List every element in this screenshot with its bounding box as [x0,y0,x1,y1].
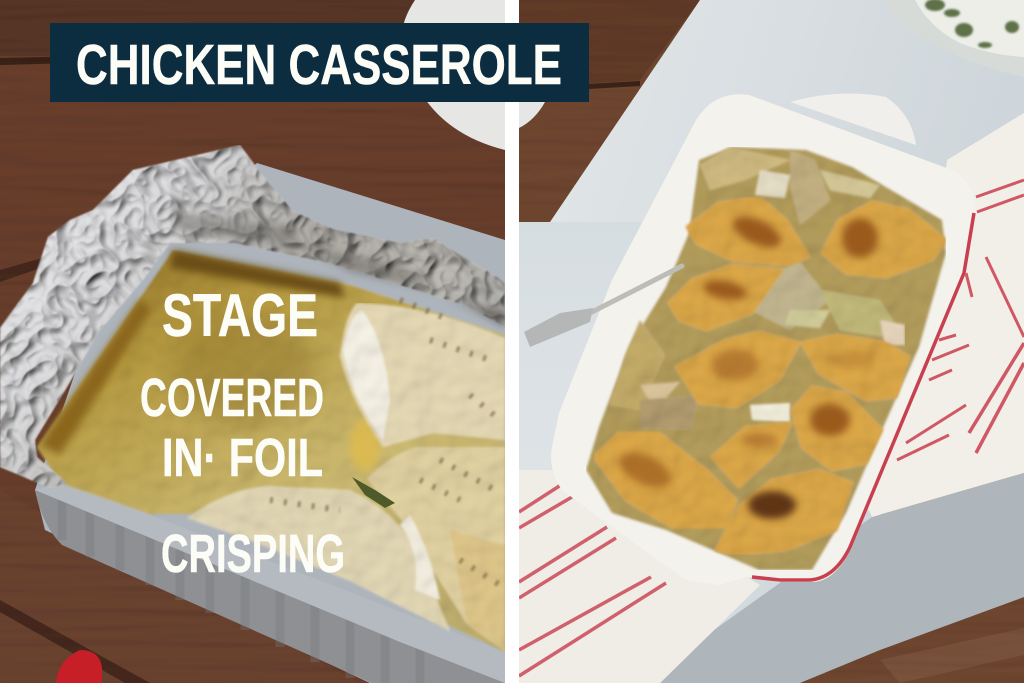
casserole sauce [37,250,505,652]
grey linen cloth top [550,0,1024,630]
herb sprig [352,477,395,508]
chicken pieces [187,303,505,652]
browned chicken spots [614,210,878,519]
chicken seasoning specks [270,300,500,585]
panel: finished casserole photo [519,0,1024,683]
label: covered in foil [140,368,324,488]
label: crisping: CRISPING [161,524,345,584]
sauce shading [40,250,380,471]
serving spoon [524,266,682,347]
wooden table left [0,0,505,683]
roasted chicken pieces [594,197,946,555]
casserole base [586,147,946,570]
label: covered in foil: IN· FOIL [162,428,323,488]
white plate edge under banner [519,102,545,128]
grey cloth lower [640,473,1024,683]
baking dish [35,163,505,683]
baking dish white [551,94,976,585]
title text: CHICKEN CASSEROLE [76,33,562,97]
side plate top right [915,0,1024,76]
tomato [56,650,102,683]
striped towel left [519,222,760,683]
striped towel right [860,113,1024,517]
label: covered in foil: COVERED [140,368,324,428]
aluminium foil [0,145,505,488]
wooden table right [519,0,1024,683]
white plate top [402,0,505,150]
label: stage: STAGE [162,282,318,349]
vegetables [610,147,905,430]
panel: covered in foil photo [0,0,505,683]
dish handle behind [790,93,916,145]
title banner [50,23,589,102]
